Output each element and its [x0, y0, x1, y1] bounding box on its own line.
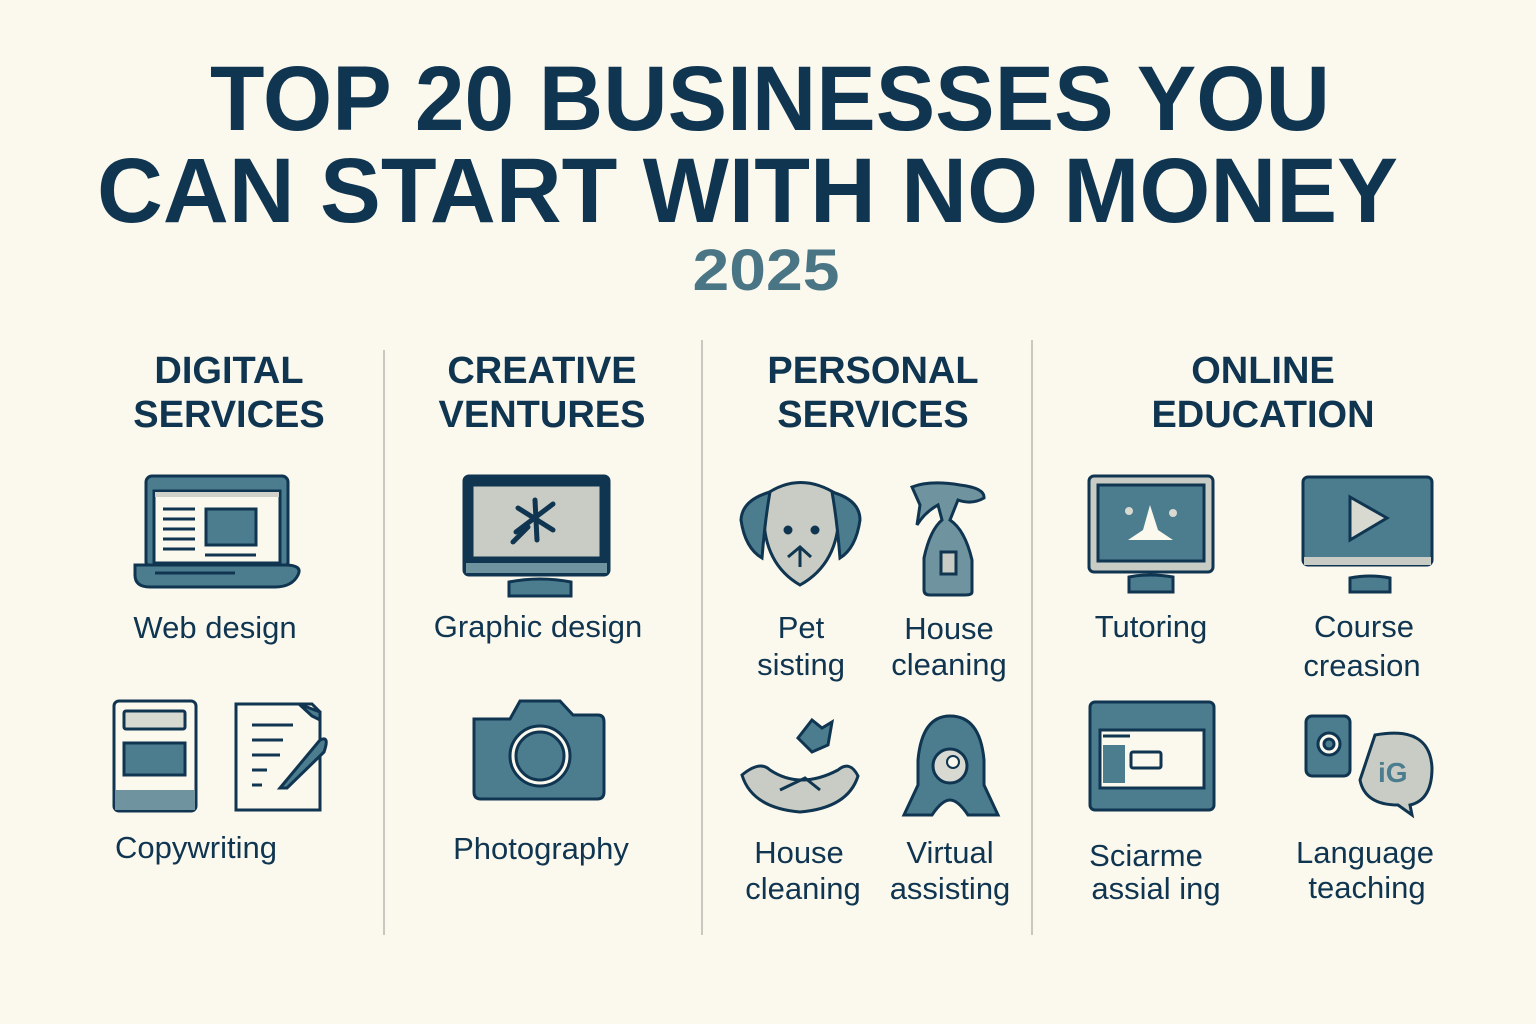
icon: language chat: iG	[1378, 757, 1408, 788]
label: screen assisting: assial ing	[1091, 871, 1221, 906]
label: language teaching: Language	[1296, 835, 1434, 870]
label: house cleaning 2: cleaning	[745, 871, 861, 906]
label: graphic design: Graphic design	[434, 609, 642, 644]
heading: personal services: SERVICES	[777, 394, 969, 436]
heading: creative ventures: CREATIVE	[447, 350, 637, 392]
subtitle: year: 2025	[692, 238, 840, 303]
panel: personal services	[741, 350, 1010, 906]
icon: laptop	[135, 476, 299, 587]
icon: dog	[741, 482, 860, 585]
label: pet sitting: sisting	[757, 647, 845, 682]
icon: camera	[474, 701, 604, 799]
icon: language chat	[1306, 716, 1432, 815]
label: language teaching: teaching	[1308, 870, 1426, 905]
heading: creative ventures: VENTURES	[439, 394, 645, 436]
heading: online education: EDUCATION	[1151, 394, 1375, 436]
icon: hands heart	[742, 720, 858, 812]
label: house cleaning: cleaning	[891, 647, 1007, 682]
label: pet sitting: Pet	[778, 610, 825, 645]
icon: tablet	[1090, 702, 1214, 810]
label: house cleaning 2: House	[754, 835, 844, 870]
panel: creative ventures	[434, 350, 645, 866]
icon: monitor with asterisk	[464, 476, 609, 596]
label: course creation: Course	[1314, 609, 1414, 644]
label: house cleaning: House	[904, 611, 994, 646]
title	[97, 48, 1398, 242]
heading: online education: ONLINE	[1191, 350, 1335, 392]
label: copywriting: Copywriting	[115, 830, 277, 865]
icon: virtual assistant	[904, 716, 998, 815]
label: tutoring: Tutoring	[1095, 609, 1207, 644]
title: CAN START WITH NO MONEY	[97, 140, 1398, 242]
heading: digital services: DIGITAL	[154, 350, 304, 392]
title: TOP 20 BUSINESSES YOU	[210, 48, 1330, 150]
icon: course video	[1303, 477, 1432, 592]
label: screen assisting: Sciarme	[1089, 838, 1203, 873]
panel: online education	[1089, 350, 1434, 906]
label: photography: Photography	[453, 831, 629, 866]
label: web design: Web design	[133, 610, 297, 645]
icon: tutoring monitor	[1089, 476, 1213, 592]
heading: digital services: SERVICES	[133, 394, 325, 436]
label: virtual assisting: assisting	[890, 871, 1010, 906]
heading: personal services: PERSONAL	[767, 350, 979, 392]
panel: digital services	[114, 350, 326, 865]
label: virtual assisting: Virtual	[906, 835, 994, 870]
icon: spray bottle	[912, 483, 984, 595]
icon: copywriting docs	[114, 701, 326, 811]
label: course creation: creasion	[1303, 648, 1421, 683]
